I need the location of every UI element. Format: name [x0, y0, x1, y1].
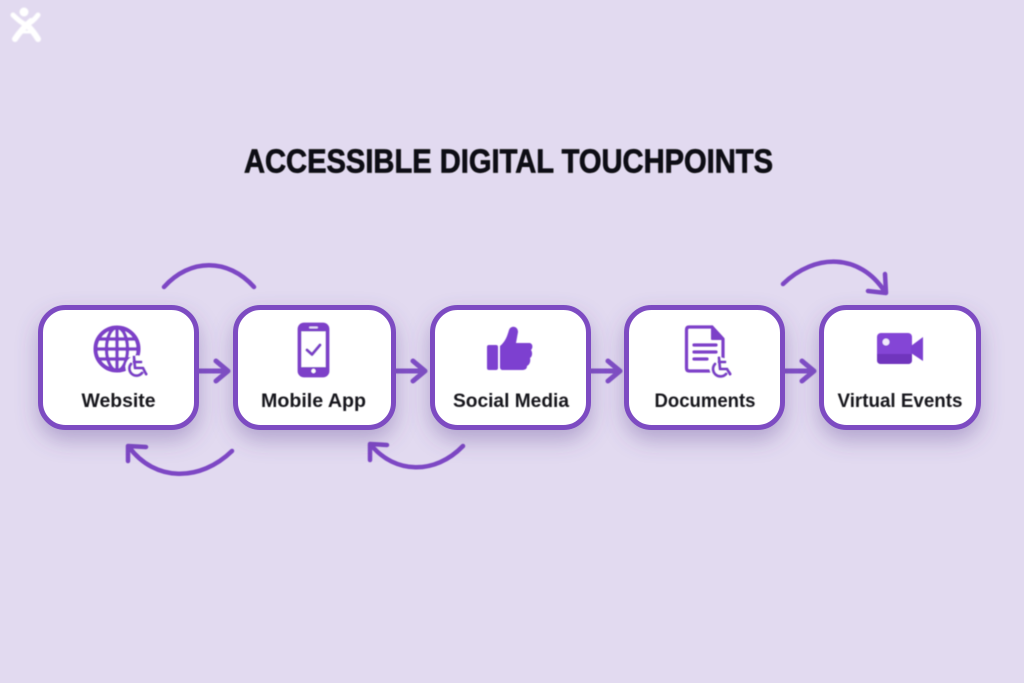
curved arrow: below Social Media back to Mobile App: [370, 444, 463, 467]
icon: thumbs up: [487, 327, 532, 370]
icon: globe with wheelchair: [96, 328, 148, 378]
arrow: Website to Mobile App: [199, 361, 228, 381]
logo: [13, 8, 38, 39]
curved arrow: below Mobile App back to Website: [128, 446, 232, 474]
label: Website: Website: [82, 391, 156, 412]
panel: Virtual Events: [822, 308, 978, 428]
label: Virtual Events: Virtual Events: [838, 391, 962, 412]
panel: Social Media: [432, 308, 588, 428]
arrow: Social Media to Documents: [591, 361, 620, 381]
panel: Website: [40, 308, 196, 428]
title: ACCESSIBLE DIGITAL TOUCHPOINTS: [244, 142, 773, 180]
curved arrow: above Website to Mobile App: [164, 265, 254, 287]
panel: Documents: [626, 308, 782, 428]
icon: video camera: [877, 333, 923, 364]
arrow: Documents to Virtual Events: [785, 361, 814, 381]
label: Social Media: Social Media: [453, 391, 569, 412]
label: Mobile App: Mobile App: [261, 391, 366, 412]
arrow: Mobile App to Social Media: [396, 361, 425, 381]
panel: Mobile App: [236, 308, 394, 428]
icon: document with wheelchair: [686, 327, 730, 378]
label: Documents: Documents: [654, 391, 756, 412]
curved arrow: above Documents to Virtual Events: [783, 262, 886, 293]
icon: phone with check: [300, 324, 328, 376]
